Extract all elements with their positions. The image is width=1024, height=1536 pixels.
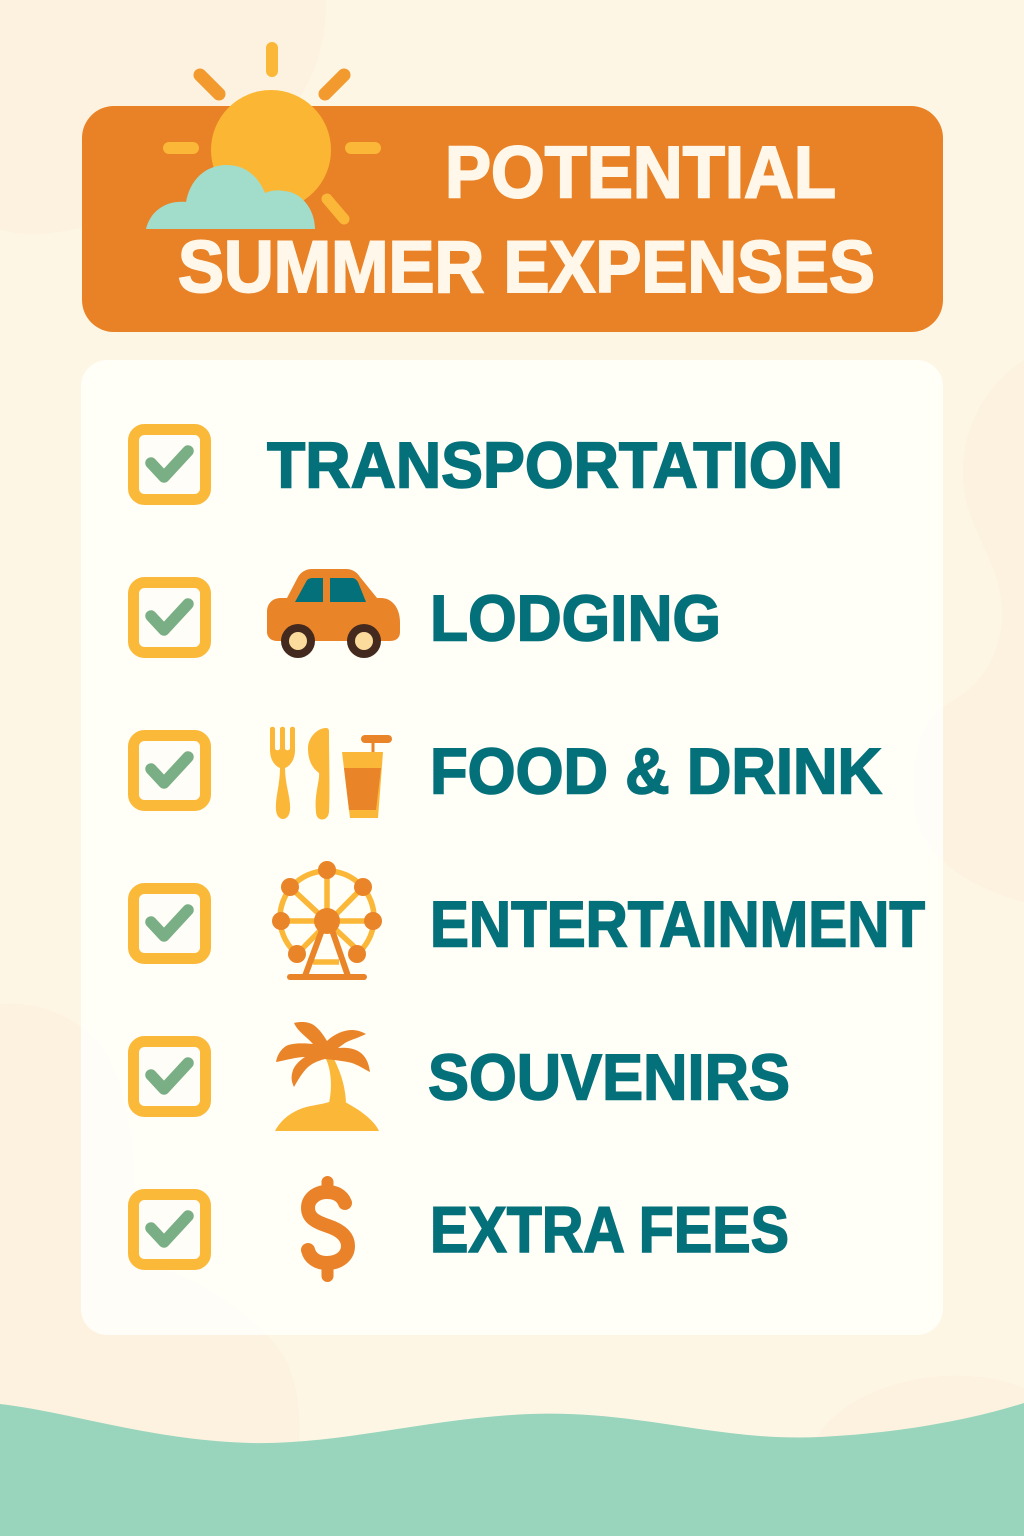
item: souvenirs	[134, 1022, 790, 1131]
item: food and drink: FOOD & DRINK	[430, 734, 882, 808]
title	[178, 132, 875, 308]
icon: palm island	[275, 1022, 379, 1131]
title: SUMMER EXPENSES	[178, 227, 875, 308]
icon: car	[267, 569, 400, 658]
wave	[0, 1403, 1024, 1536]
header banner	[82, 106, 943, 332]
item: entertainment: ENTERTAINMENT	[430, 888, 925, 960]
item: lodging: LODGING	[430, 582, 721, 654]
item: souvenirs: SOUVENIRS	[428, 1040, 790, 1114]
item: entertainment	[134, 861, 925, 980]
item: food and drink	[134, 727, 882, 820]
icon: fork, knife and cup	[270, 727, 392, 820]
panel: checklist	[81, 360, 943, 1335]
item: extra fees: EXTRA FEES	[430, 1193, 789, 1266]
item: lodging	[134, 569, 721, 658]
icon: dollar sign	[308, 1182, 348, 1276]
item: transportation: TRANSPORTATION	[267, 428, 843, 502]
item: extra fees	[134, 1182, 789, 1276]
title: POTENTIAL	[445, 132, 836, 214]
icon: sun and cloud	[146, 48, 375, 229]
icon: ferris wheel	[272, 861, 382, 980]
